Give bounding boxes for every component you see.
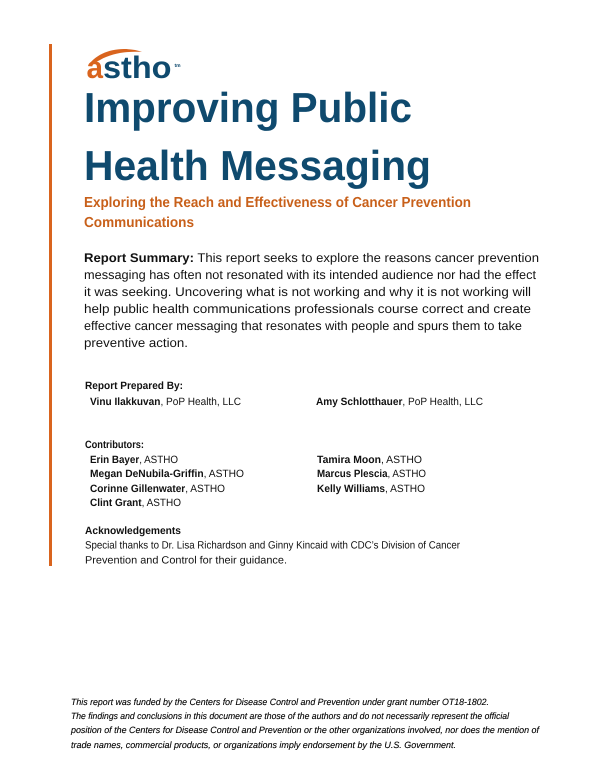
acknowledgements: Prevention and Control for their guidance. — [85, 554, 287, 566]
report prepared by — [85, 380, 483, 408]
orange vertical accent bar — [49, 44, 52, 566]
subtitle: Exploring the Reach and Effectiveness of Cancer Prevention — [84, 195, 471, 211]
funding disclaimer: The findings and conclusions in this document are those of the authors and do not necessarily represent the official — [71, 711, 510, 721]
contributors: Marcus Plescia, ASTHO — [317, 468, 426, 480]
report summary text block: it was seeking. Uncovering what is not working and why it is not working will — [84, 285, 531, 299]
title — [84, 84, 431, 189]
acknowledgements — [85, 525, 460, 566]
report summary text block: help public health communications professionals course correct and create — [84, 302, 531, 316]
acknowledgements: Special thanks to Dr. Lisa Richardson and Ginny Kincaid with CDC’s Division of Cancer — [85, 540, 460, 552]
report summary text block — [84, 251, 539, 350]
title: Improving Public — [84, 84, 412, 131]
subtitle — [84, 195, 471, 231]
report summary text block: Report Summary: This report seeks to explore the reasons cancer prevention — [84, 251, 539, 265]
report prepared by: Report Prepared By: — [85, 380, 183, 392]
contributors: Clint Grant, ASTHO — [90, 497, 181, 509]
contributors: Contributors: — [85, 439, 144, 451]
contributors: Kelly Williams, ASTHO — [317, 483, 425, 495]
acknowledgements: Acknowledgements — [85, 525, 181, 537]
title: Health Messaging — [84, 142, 431, 189]
funding disclaimer: trade names, commercial products, or organizations imply endorsement by the U.S. Government. — [71, 740, 456, 750]
report prepared by: Vinu Ilakkuvan, PoP Health, LLC — [90, 396, 241, 408]
subtitle: Communications — [84, 215, 194, 231]
contributors — [85, 439, 426, 509]
logo: astho: stho — [103, 50, 172, 85]
contributors: Erin Bayer, ASTHO — [90, 454, 178, 466]
contributors: Megan DeNubila-Griffin, ASTHO — [90, 468, 244, 480]
logo: astho: a — [86, 50, 104, 85]
report summary text block: preventive action. — [84, 336, 188, 350]
report summary text block: effective cancer messaging that resonates with people and spurs them to take — [84, 319, 522, 333]
logo: astho — [86, 49, 181, 85]
report summary text block: messaging has often not resonated with its intended audience nor had the effect — [84, 268, 537, 282]
report prepared by: Amy Schlotthauer, PoP Health, LLC — [316, 396, 483, 408]
contributors: Corinne Gillenwater, ASTHO — [90, 483, 225, 495]
funding disclaimer: position of the Centers for Disease Control and Prevention or the other organizations involved, nor does the mention of — [70, 725, 540, 735]
logo: astho: tm — [174, 63, 181, 69]
funding disclaimer: This report was funded by the Centers for Disease Control and Prevention under grant number OT18-1802. — [71, 697, 489, 707]
funding disclaimer — [70, 697, 540, 750]
contributors: Tamira Moon, ASTHO — [317, 454, 422, 466]
